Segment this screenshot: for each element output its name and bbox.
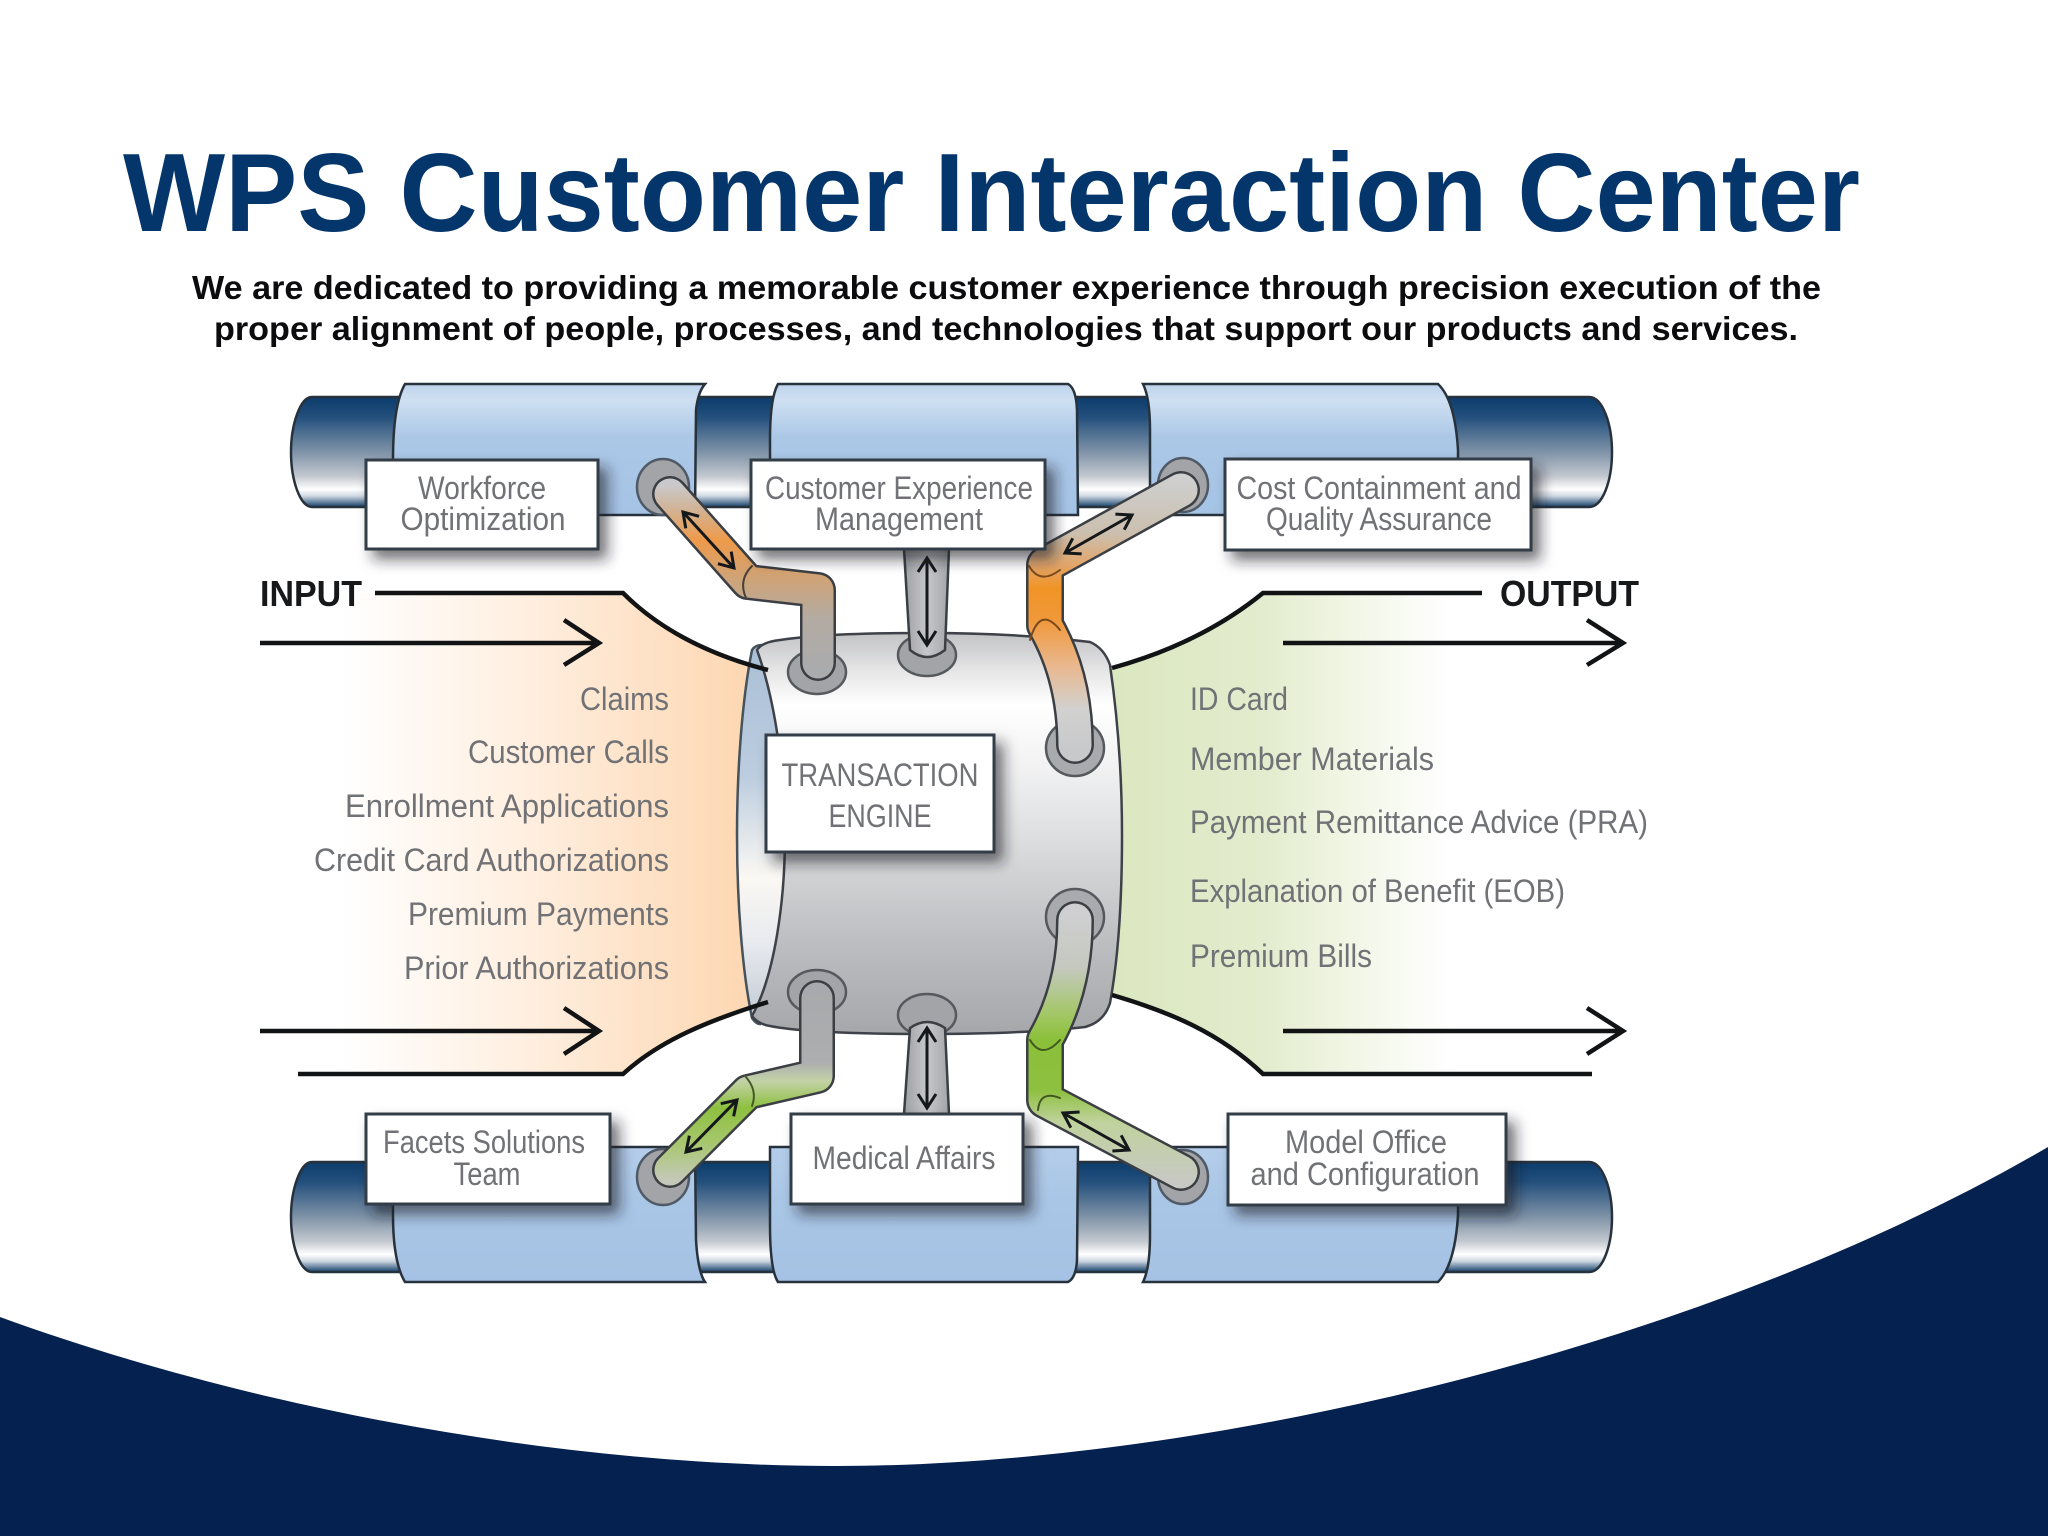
- output arrow upper: [1283, 620, 1623, 665]
- subtitle text: proper alignment of people, processes, and technologies that support our products and services.: [214, 310, 1798, 347]
- label box: model office and configuration: [1228, 1114, 1506, 1205]
- port: top middle: [898, 634, 956, 676]
- connector: top right orange pipe: [1029, 490, 1181, 745]
- arrow: top left: [683, 512, 734, 568]
- arrow: bottom left: [686, 1100, 737, 1152]
- top sleeve right: [1143, 384, 1458, 515]
- top sleeve middle: [770, 384, 1078, 515]
- port: pipeline top left: [637, 459, 689, 515]
- connector: bottom left green pipe: [670, 998, 817, 1170]
- input list: Claims: [580, 681, 669, 717]
- output arrow lower: [1283, 1008, 1623, 1054]
- port: right lower: [1046, 889, 1104, 945]
- port: bottom left: [788, 970, 846, 1014]
- bottom tube: [291, 1162, 1612, 1272]
- label box: workforce optimization: Workforce: [418, 470, 546, 506]
- label box: medical affairs: [791, 1114, 1023, 1204]
- label box: customer experience management: Management: [815, 501, 983, 537]
- output list: [1190, 681, 1648, 974]
- output list: ID Card: [1190, 681, 1288, 717]
- bottom sleeve middle: [770, 1147, 1078, 1282]
- top sleeve left: [393, 384, 705, 515]
- output list: Explanation of Benefit (EOB): [1190, 873, 1565, 909]
- input list: [314, 681, 669, 986]
- input arrow upper: [260, 620, 599, 665]
- subtitle text: We are dedicated to providing a memorable customer experience through precision execution of the: [192, 269, 1821, 306]
- output outline lines and arrows: [1112, 593, 1623, 1074]
- output list: Member Materials: [1190, 741, 1434, 777]
- arrow: bottom middle: [926, 1028, 928, 1108]
- bottom sleeve right: [1143, 1147, 1458, 1282]
- top tube: [291, 397, 1612, 507]
- arrow: top right: [1065, 515, 1132, 553]
- drum body: [752, 633, 1122, 1034]
- label box: facets solutions team: [366, 1114, 610, 1204]
- top pipeline: [291, 384, 1612, 515]
- input flow area: [340, 593, 768, 1074]
- left rim: [737, 645, 785, 1024]
- input arrow lower: [260, 1008, 599, 1054]
- input list: Customer Calls: [468, 734, 669, 770]
- label box: transaction engine: ENGINE: [828, 798, 932, 834]
- input list: Enrollment Applications: [345, 788, 669, 824]
- output list: Payment Remittance Advice (PRA): [1190, 804, 1648, 840]
- label box: customer experience management: [751, 460, 1045, 549]
- port: pipeline top right: [1158, 458, 1208, 512]
- double arrows on connectors: [683, 512, 1132, 1152]
- port: pipeline bottom left: [637, 1149, 689, 1205]
- input label: INPUT: [260, 573, 362, 614]
- label box: workforce optimization: Optimization: [400, 501, 566, 537]
- label box: workforce optimization: [366, 460, 598, 549]
- label box: facets solutions team: Facets Solutions: [383, 1124, 585, 1160]
- label box: transaction engine: [766, 735, 994, 852]
- output label: OUTPUT: [1500, 573, 1639, 614]
- transaction engine drum: [737, 633, 1122, 1034]
- output flow area: [1112, 593, 1480, 1074]
- connector: top middle grey pipe: [904, 549, 949, 657]
- connector: top left orange pipe: [670, 494, 818, 663]
- port: top left: [788, 650, 846, 694]
- label box: cost containment and quality assurance: [1225, 459, 1531, 550]
- label box: model office and configuration: and Configuration: [1250, 1156, 1480, 1192]
- output list: Premium Bills: [1190, 938, 1372, 974]
- port: pipeline bottom right: [1158, 1150, 1208, 1204]
- port: bottom middle: [898, 994, 956, 1036]
- input list: Credit Card Authorizations: [314, 842, 669, 878]
- label box: model office and configuration: Model Office: [1285, 1124, 1447, 1160]
- bottom sleeve left: [393, 1147, 705, 1282]
- input list: Prior Authorizations: [404, 950, 669, 986]
- label box: medical affairs: Medical Affairs: [812, 1140, 996, 1176]
- label box: transaction engine: TRANSACTION: [782, 757, 978, 793]
- port: right upper: [1046, 720, 1104, 776]
- subtitle text: [192, 269, 1821, 347]
- bottom pipeline: [291, 1147, 1612, 1282]
- arrow: top middle: [926, 558, 928, 645]
- label box: cost containment and quality assurance: Quality Assurance: [1266, 501, 1492, 537]
- label box: customer experience management: Customer Experience: [765, 470, 1033, 506]
- label box: facets solutions team: Team: [454, 1156, 520, 1192]
- input list: Premium Payments: [408, 896, 669, 932]
- connector: bottom right green pipe: [1030, 920, 1181, 1172]
- bottom navy swoosh: [0, 1147, 2048, 1536]
- label box: cost containment and quality assurance: Cost Containment and: [1236, 470, 1522, 506]
- arrow: bottom right: [1063, 1113, 1129, 1150]
- title: WPS Customer Interaction Center: [123, 131, 1860, 255]
- connector: bottom middle grey pipe: [904, 1022, 949, 1114]
- input outline lines and arrows: [260, 593, 768, 1074]
